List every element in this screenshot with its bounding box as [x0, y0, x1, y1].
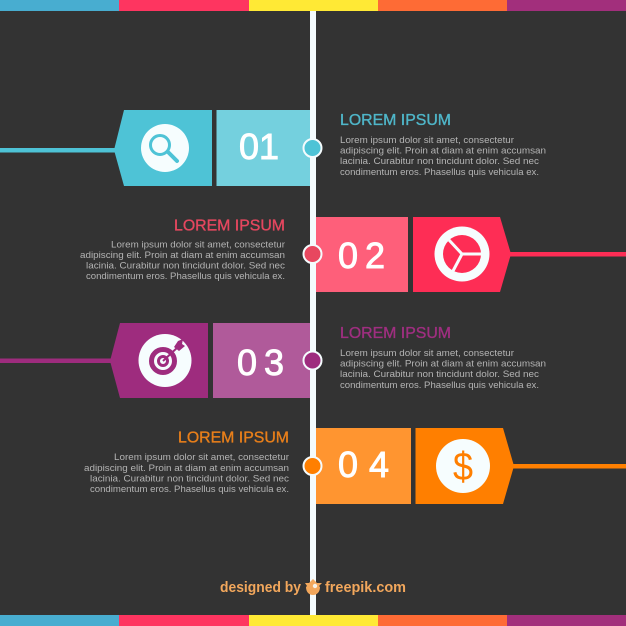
body text 03: condimentum eros. Phasellus quis vehicula ex. [340, 379, 539, 390]
icon: dollar coin: $ [453, 445, 473, 489]
freepik.com: freepik.com [325, 579, 406, 596]
icon tag 03 [110, 323, 208, 398]
node 02 [304, 245, 322, 263]
number 03: 03 [237, 342, 284, 383]
node 03 [304, 352, 322, 370]
icon tag 01 [114, 110, 212, 186]
icon: pie chart [434, 226, 490, 282]
body text 04: lacinia. Curabitur non tincidunt dolor. Sed nec [90, 472, 289, 484]
step 03 [0, 323, 546, 398]
connector line 02 [508, 252, 626, 256]
connector line 04 [511, 464, 626, 468]
body text 01: Lorem ipsum dolor sit amet, consectetur [340, 134, 514, 145]
number box 02 [316, 217, 408, 292]
icon tag 02 [413, 217, 511, 292]
body text 02: Lorem ipsum dolor sit amet, consectetur [111, 238, 285, 250]
number box 03 [213, 323, 310, 398]
body text 03: Lorem ipsum dolor sit amet, consectetur [340, 347, 514, 358]
bottom colour bar [0, 615, 626, 626]
body text 01: adipiscing elit. Proin at diam at enim accumsan [340, 144, 546, 156]
number 01: 01 [239, 126, 279, 167]
body text 04: Lorem ipsum dolor sit amet, consectetur [114, 451, 289, 462]
body text 02 [80, 238, 285, 281]
heading 01: LOREM IPSUM [340, 112, 451, 129]
icon: dollar coin [436, 439, 490, 493]
body text 04: condimentum eros. Phasellus quis vehicula ex. [90, 483, 289, 494]
node 01 [304, 139, 322, 157]
footer credit [220, 579, 406, 596]
body text 03: lacinia. Curabitur non tincidunt dolor. Sed nec [340, 368, 539, 379]
number 04: 04 [338, 444, 389, 485]
top colour bar [0, 0, 626, 11]
designed by: designed by [220, 579, 302, 596]
icon: magnifying glass [141, 124, 189, 172]
step 02 [80, 217, 626, 292]
icon tag 04 [416, 428, 514, 504]
body text 01: condimentum eros. Phasellus quis vehicula ex. [340, 166, 539, 177]
step 01 [0, 110, 546, 186]
body text 04 [84, 451, 289, 494]
number box 01 [216, 110, 310, 186]
body text 01 [340, 134, 546, 177]
body text 03 [340, 347, 546, 390]
number box 04 [316, 428, 411, 504]
body text 02: lacinia. Curabitur non tincidunt dolor. Sed nec [86, 260, 285, 270]
body text 02: condimentum eros. Phasellus quis vehicula ex. [86, 270, 285, 281]
body text 02: adipiscing elit. Proin at diam at enim accumsan [80, 249, 285, 260]
icon: target [138, 334, 192, 387]
heading 03: LOREM IPSUM [340, 325, 451, 342]
number 02: 02 [338, 235, 385, 276]
step 04 [84, 428, 626, 504]
connector line 03 [0, 358, 112, 363]
body text 03: adipiscing elit. Proin at diam at enim accumsan [340, 358, 546, 368]
icon: freepik mascot [305, 579, 322, 595]
heading 04: LOREM IPSUM [178, 430, 289, 446]
heading 02: LOREM IPSUM [174, 218, 285, 234]
vertical timeline [310, 11, 316, 615]
connector line 01 [0, 148, 116, 152]
body text 01: lacinia. Curabitur non tincidunt dolor. Sed nec [340, 155, 539, 166]
node 04 [304, 457, 322, 475]
body text 04: adipiscing elit. Proin at diam at enim accumsan [84, 462, 289, 473]
